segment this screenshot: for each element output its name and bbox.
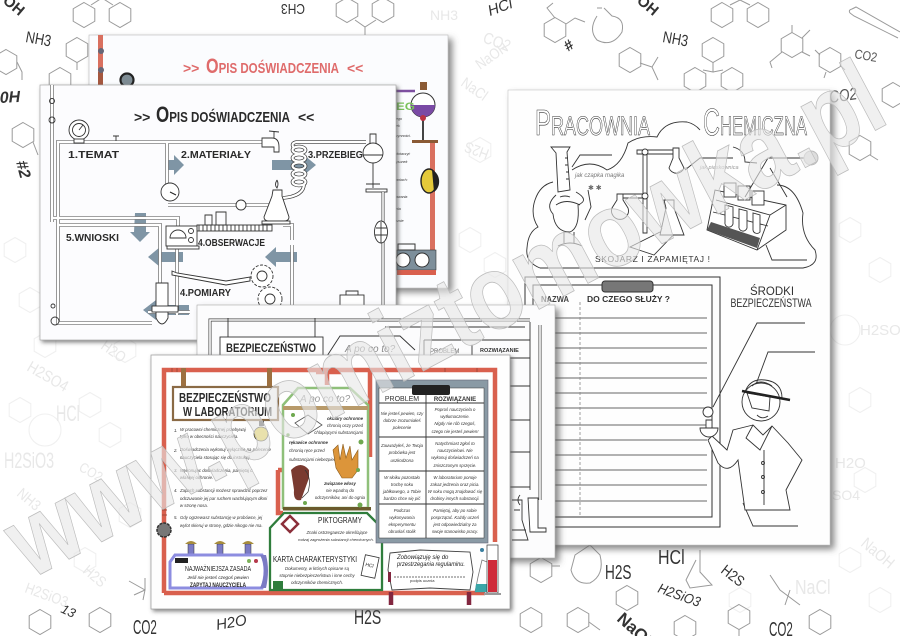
numbered rules: nauczyciela stosując się do instrukcji. [180, 455, 251, 460]
green bottle: protective equipment: odczynników, ani do ognia [315, 495, 366, 500]
wizard character [550, 184, 602, 246]
clipboard table for lab tool names: NAZWA [541, 294, 569, 304]
background: chemistry formulas and molecules: # [561, 36, 578, 55]
empty table: PROBLEM [430, 349, 459, 355]
green bottle: protective equipment: okulary ochronne [327, 416, 364, 421]
green step heading and instructions: ek [396, 124, 400, 128]
green panel: pictograms and safety card: PIKTOGRAMY [318, 516, 363, 525]
clipboard table: problem and solution: wykonywania [389, 515, 415, 520]
panel: front sheet, coloured safety rules [151, 355, 510, 609]
worksheet title: PRACOWNIA [535, 102, 650, 143]
clipboard table: problem and solution: probówka jest [388, 450, 416, 455]
background: chemistry formulas and molecules: NH3 [430, 7, 458, 23]
heading: << [298, 109, 314, 125]
clipboard table: problem and solution: wytłumaczenie. [440, 414, 470, 419]
leader lines with notes: jak piaskownica [699, 165, 739, 171]
section labels: 5.WNIOSKI [66, 232, 119, 244]
graduated cylinder hat [551, 147, 570, 192]
background: chemistry formulas and molecules: H2S [605, 561, 631, 584]
background: chemistry formulas and molecules: 13 [59, 601, 79, 621]
clipboard table: problem and solution: Poproś nauczyciela o [435, 407, 476, 412]
worksheet title: CHEMICZNA [703, 102, 807, 144]
clipboard table: problem and solution: Nie jesteś pewien, czy [381, 411, 424, 416]
background: chemistry formulas and molecules: CH3 [281, 1, 305, 17]
panel: worksheet Pracownia Chemiczna [508, 90, 830, 545]
torn paper: pledge: przestrzegania regulaminu. [396, 562, 465, 568]
green step heading and instructions: nia [396, 207, 401, 211]
clipboard table: problem and solution: wykonuj doświadczeń na [431, 455, 479, 460]
section labels: 3.PRZEBIEG [308, 149, 363, 161]
clipboard table: problem and solution: bardzo chce się pić [384, 496, 421, 501]
empty table [424, 340, 530, 487]
sign title: BEZPIECZEŃSTWO [226, 340, 316, 355]
background: chemistry formulas and molecules: CO2 [828, 85, 859, 107]
numbered rules: Wykonując doświadczenia, pamiętaj o [180, 468, 253, 473]
clipboard table: problem and solution: polecenie [392, 425, 412, 430]
numbered rules: Zapach substancji możesz sprawdzić poprzez [179, 488, 268, 493]
blue tank with main rule: Jeśli nie jesteś czegoś pewien [186, 575, 249, 580]
section labels [66, 149, 363, 299]
leader lines with notes: jak czapka magika [574, 173, 625, 179]
outlined bottle title: A po co to? [344, 344, 396, 355]
clipboard table: problem and solution: dobrze zrozumiałeś [383, 418, 421, 423]
torn paper: pledge: podpis ucznia [410, 578, 435, 583]
green bottle: protective equipment: nie wpadną do [326, 488, 355, 493]
numbered rules: tylko w obecności nauczyciela. [180, 434, 239, 439]
beaker [512, 495, 546, 540]
green bottle: protective equipment [283, 388, 371, 510]
heading: >> [134, 109, 150, 125]
background: chemistry formulas and molecules: H2SO4 [24, 359, 71, 396]
numbered rules [173, 427, 272, 528]
red pipe with valves [98, 35, 134, 87]
arrows [130, 155, 316, 320]
background: chemistry formulas and molecules: H2SiO3 [4, 448, 54, 473]
prompt: skojarz i zapamiętaj: SKOJARZ I ZAPAMIĘTAJ ! [595, 254, 710, 264]
clipboard table: problem and solution: Podczas [394, 508, 411, 513]
background: chemistry formulas and molecules: #2 [12, 159, 33, 180]
test tube rack [707, 183, 786, 250]
glass cylinder on pipe [152, 283, 178, 324]
clipboard table: problem and solution: zniszczonym sprzęcie. [433, 463, 476, 468]
green step heading and instructions: aniach: [396, 178, 408, 182]
clipboard table: problem and solution: swoje stanowisko pracy. [432, 529, 478, 534]
background: chemistry formulas and molecules: NaOH [472, 38, 511, 73]
numbered rules: 1. [174, 428, 178, 433]
clipboard table: problem and solution: nauczycielowi. Nie [437, 448, 473, 453]
icon: light bulb [254, 421, 268, 441]
green step heading and instructions: ysunek [395, 160, 408, 164]
green bottle: protective equipment: A po co to? [299, 394, 351, 405]
panel: back sheet, black-and-white safety rules [197, 305, 555, 558]
clipboard table: problem and solution: jabłkowego, a Tobie [382, 489, 422, 494]
green bottle: protective equipment: chronią ręce przed [289, 448, 325, 453]
clipboard table: problem and solution: uszkodzona [391, 458, 414, 463]
green panel: pictograms and safety card: odczynników chemicznych. [291, 580, 343, 585]
safety heading: BEZPIECZEŃSTWA [730, 297, 812, 310]
background: chemistry formulas and molecules: CO2 [481, 30, 513, 56]
cloud outline [527, 122, 816, 268]
beaker and red cylinder [475, 545, 501, 595]
clipboard table: problem and solution: W laboratorium ponoje [433, 475, 477, 480]
background: chemistry formulas and molecules: H2O [215, 612, 248, 634]
empty table: ROZWIĄZANIE [480, 348, 519, 354]
numbered rules: Doświadczenia wykonuj wyłącznie na polecenie [180, 447, 272, 452]
numbered rules: własnej ochronie. [180, 475, 213, 480]
green bottle: protective equipment: rękawice ochronne [289, 440, 329, 445]
sign title [220, 337, 323, 367]
section labels: 2.MATERIAŁY [181, 149, 251, 161]
numbered rules: 4. [174, 488, 178, 493]
clipboard table: problem and solution: obrusłaś stolik [388, 529, 416, 534]
wizard character: ✱ ✱ [588, 184, 602, 192]
green step heading and instructions: ego [396, 117, 402, 121]
gauge box and lever [166, 226, 250, 285]
clipboard table: problem and solution: W soku mogą znajdować się [428, 489, 483, 494]
heading: OPIS DOŚWIADCZENIA [156, 102, 290, 127]
section labels: 4.OBSERWACJE [198, 237, 265, 249]
clipboard table: problem and solution: PROBLEM [385, 396, 419, 403]
background: chemistry formulas and molecules: H2SiO3 [656, 580, 703, 610]
green step heading and instructions: zynności. [395, 134, 411, 138]
background: chemistry formulas and molecules: HCl [658, 546, 685, 568]
clipboard table for lab tool names [525, 277, 720, 527]
icon: gear [157, 523, 171, 537]
pipework [49, 85, 292, 325]
clipboard table for lab tool names: DO CZEGO SŁUŻY ? [587, 294, 670, 304]
section labels: 4.POMIARY [180, 287, 231, 299]
clipboard table: problem and solution: Nigdy nie rób czegoś, [434, 421, 476, 426]
clipboard table: problem and solution: Pamiętaj, aby po sobie [433, 508, 477, 513]
numbered rules: 5. [174, 515, 178, 520]
green panel: pictograms and safety card: HCl [365, 562, 374, 570]
ropes and hanging sign: W LABORATORIUM [183, 404, 272, 419]
numbered rules: Gdy ogrzewasz substancję w probówce, jej [180, 515, 263, 520]
background: chemistry formulas and molecules: H2S [80, 561, 110, 590]
cooling coil and flasks [262, 134, 388, 305]
background: chemistry formulas and molecules: H2O [98, 337, 130, 366]
clipboard table: problem and solution: drobiny innych substancji. [430, 496, 480, 501]
gauges box at bottom right [396, 244, 436, 275]
green panel: pictograms and safety card: rodzaj zagrożenia substancji chemicznych. [298, 537, 374, 542]
background: chemistry formulas and molecules: CO2 [76, 459, 106, 485]
background: chemistry formulas and molecules: HCl [56, 401, 80, 426]
green panel: pictograms and safety card [270, 513, 382, 590]
leader lines with notes [572, 151, 818, 260]
green bottle: protective equipment: związane włosy [323, 481, 356, 486]
clipboard table: problem and solution: ROZWIĄZANIE [434, 397, 476, 403]
background: chemistry formulas and molecules: SO4 [832, 487, 860, 503]
green bottle: protective equipment: substancjami niebezpiecznymi [289, 457, 348, 462]
outlined bottle title [327, 336, 415, 356]
gears [251, 265, 364, 311]
background: chemistry formulas and molecules: H2S [718, 561, 748, 590]
safety heading: ŚRODKI [750, 285, 794, 298]
back sheet title: >> [183, 60, 199, 76]
green step heading and instructions [395, 101, 415, 223]
safety heading [730, 285, 812, 310]
numbered rules: wylot skieruj w stronę, gdzie nikogo nie ma. [180, 523, 263, 528]
panel: back sheet, coloured experiment description [89, 35, 448, 288]
gauges and faucet [69, 120, 279, 210]
torn paper: pledge [388, 550, 473, 590]
clipboard table: problem and solution [376, 380, 488, 543]
green step heading and instructions: EG [396, 101, 415, 113]
clipboard table: problem and solution: zakaz jedzenia oraz picia. [429, 482, 480, 487]
numbered rules: 2. [173, 448, 178, 453]
green step heading and instructions: dotaczyć [396, 152, 410, 156]
background: chemistry formulas and molecules: H2S [462, 138, 491, 163]
clipboard table: problem and solution: jest odpowiedzialny za [432, 522, 477, 527]
background: chemistry formulas and molecules: H2SiO3 [23, 579, 71, 610]
clipboard table: problem and solution: W słoiku pozostało [384, 475, 421, 480]
panel: front sheet, line-art experiment description [40, 85, 396, 340]
clipboard table: problem and solution: posprzątać. Każdy uczeń [430, 515, 480, 520]
clipboard table: problem and solution: trochę soku [391, 482, 414, 487]
pipes [210, 318, 540, 500]
background: chemistry formulas and molecules: H2S [354, 605, 381, 629]
worksheet title [535, 102, 807, 144]
blue tank with main rule: NAJWAŻNIEJSZA ZASADA [185, 564, 251, 573]
background: chemistry formulas and molecules: NaCl [458, 74, 491, 104]
green panel: pictograms and safety card: Znaki ostrzegawcze określające [306, 530, 368, 535]
green step heading and instructions: smie [396, 219, 404, 223]
blue tank with main rule: ZAPYTAJ NAUCZYCIELA [190, 583, 247, 589]
red pipe frame [162, 368, 495, 605]
numbered rules: w stronę nosa. [180, 503, 208, 508]
clipboard table: problem and solution: czego nie jesteś pewien! [432, 429, 479, 434]
background: chemistry formulas and molecules: NaOH [857, 535, 897, 573]
green bottle: protective equipment: chlapiącymi substancjami [314, 430, 364, 435]
laboratory stand with flasks [611, 148, 684, 255]
back sheet title: OPIS DOŚWIADCZENIA [206, 55, 339, 78]
green panel: pictograms and safety card: KARTA CHARAKTERYSTYKI [273, 555, 357, 564]
green step heading and instructions: awania [396, 195, 407, 199]
clipboard table: problem and solution: Zauważyłeś, że Twoja [380, 443, 424, 448]
back sheet title: << [347, 60, 363, 76]
numbered rules: odczuwanie jej par ruchem wachlującym dłoni [180, 496, 268, 501]
green panel: pictograms and safety card: Dokumenty, w których opisane są [285, 566, 350, 571]
background: chemistry formulas and molecules: NH3 [14, 484, 45, 514]
background: chemistry formulas and molecules: NH3 [661, 29, 689, 51]
scientist with goggles [700, 323, 815, 526]
ropes and hanging sign: BEZPIECZEŃSTWO [179, 390, 271, 405]
clipboard table: problem and solution: Natychmiast zgłoś to [435, 441, 475, 446]
numbered rules: W pracowni chemicznej przebywaj [180, 427, 247, 432]
green panel: pictograms and safety card: stopnie niebezpieczeństwa i inne cechy [279, 573, 355, 578]
ropes and hanging sign [173, 368, 278, 420]
clipboard table: problem and solution: eksperymentu [388, 522, 416, 527]
purple flask with yellow lamp and burner [396, 82, 439, 273]
background: chemistry formulas and molecules: NH3 [24, 29, 52, 51]
background: chemistry formulas and molecules: H2O [835, 455, 866, 472]
background: chemistry formulas and molecules: CO2 [853, 46, 879, 65]
numbered rules: 3. [174, 468, 178, 473]
section labels: 1.TEMAT [68, 149, 120, 161]
background: chemistry formulas and molecules: NaCl [795, 576, 831, 598]
torn paper: pledge: Zobowiązuję się do [396, 555, 449, 561]
green bottle: protective equipment: chronią oczy przed [327, 423, 364, 428]
blue tank with main rule [170, 541, 268, 589]
